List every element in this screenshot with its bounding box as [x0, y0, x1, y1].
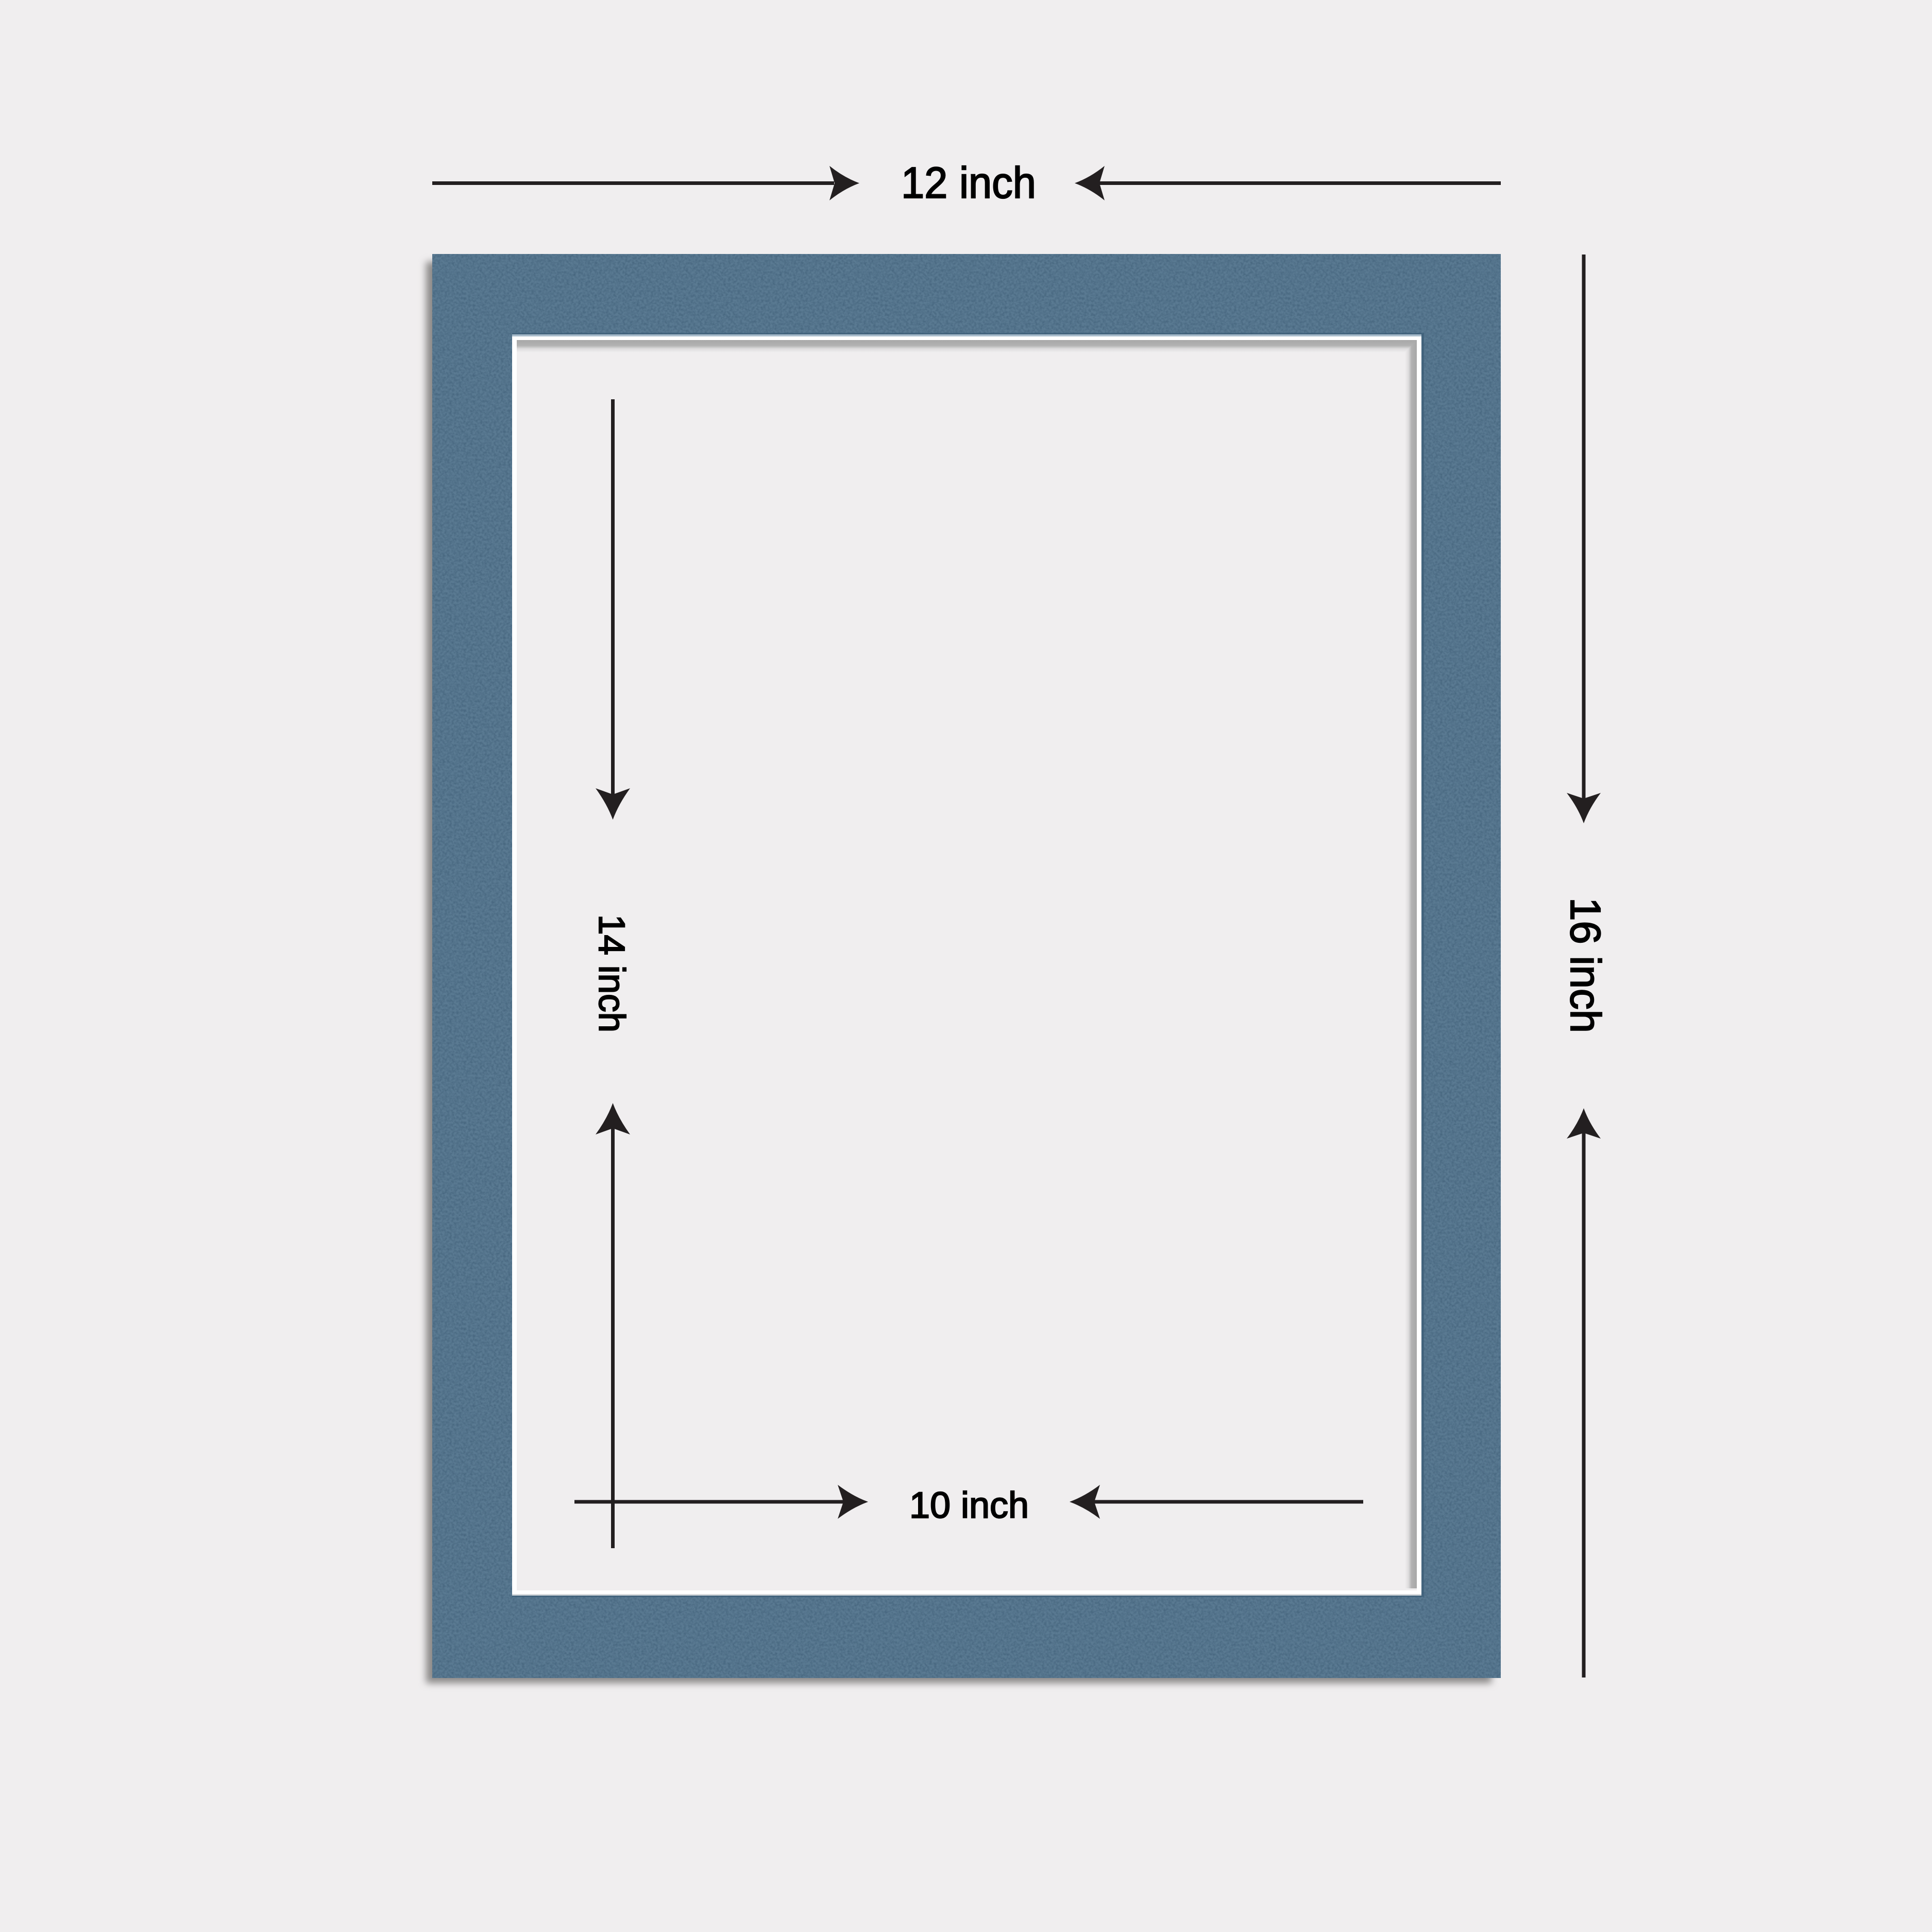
- arrow: 16 inch top: [1567, 255, 1601, 823]
- label: 12 inch: 12 inch: [901, 159, 1036, 208]
- arrow: 14 inch bottom: [596, 1103, 630, 1548]
- arrow: 12 inch right: [1075, 166, 1501, 200]
- panel: blue mat board: [426, 254, 1501, 1683]
- window opening: [517, 340, 1417, 1590]
- white bevel of the window: [512, 334, 1421, 1596]
- window top shadow: [517, 340, 1417, 352]
- bevel top strip: [512, 334, 1421, 336]
- mat drop shadow: [426, 262, 1492, 1683]
- bevel dark cut edge: [512, 333, 1424, 1597]
- label: 14 inch: 14 inch: [591, 914, 632, 1032]
- label: 10 inch: 10 inch: [909, 1485, 1029, 1526]
- arrow: 10 inch right: [1070, 1485, 1363, 1519]
- label: 16 inch: 16 inch: [1562, 897, 1609, 1033]
- arrow: 14 inch top: [596, 399, 630, 820]
- mat board paper grain: [432, 254, 1501, 1678]
- arrow: 16 inch bottom: [1567, 1108, 1601, 1677]
- mat board colour: [432, 254, 1501, 1678]
- bevel bottom strip: [512, 1594, 1421, 1596]
- arrow: 10 inch left: [574, 1485, 868, 1519]
- window right shadow: [1405, 340, 1417, 1588]
- arrow: 12 inch left: [432, 166, 859, 200]
